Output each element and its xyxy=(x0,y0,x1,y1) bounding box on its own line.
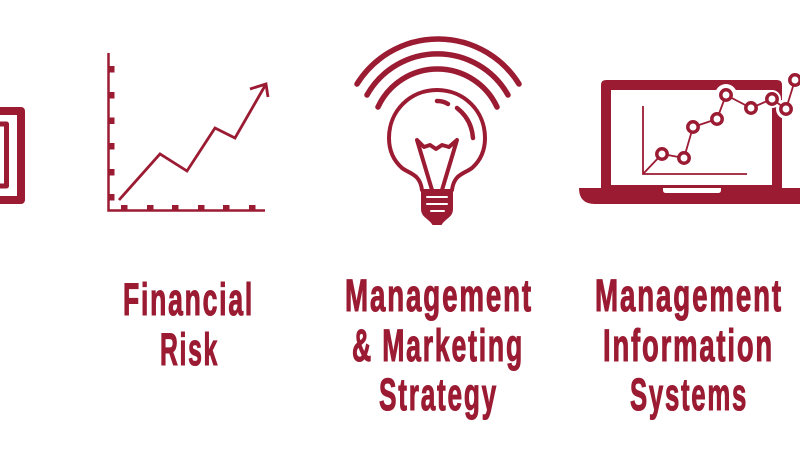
label: Management & Marketing Strategy: Strategy xyxy=(379,369,498,420)
icon: light bulb with signal arcs xyxy=(357,39,519,224)
icon: cropped framed square xyxy=(0,111,21,200)
icon: laptop with rising line chart xyxy=(579,75,800,204)
label: Financial Risk: Risk xyxy=(160,324,219,375)
label: Management & Marketing Strategy: Management xyxy=(345,270,533,321)
icon: financial line chart xyxy=(108,53,268,210)
label: Management & Marketing Strategy: & Marketing xyxy=(352,320,524,371)
label: Management Information Systems xyxy=(595,270,783,420)
label: Management & Marketing Strategy xyxy=(345,270,533,420)
label: Financial Risk: Financial xyxy=(123,274,254,325)
label: Financial Risk xyxy=(123,274,254,375)
